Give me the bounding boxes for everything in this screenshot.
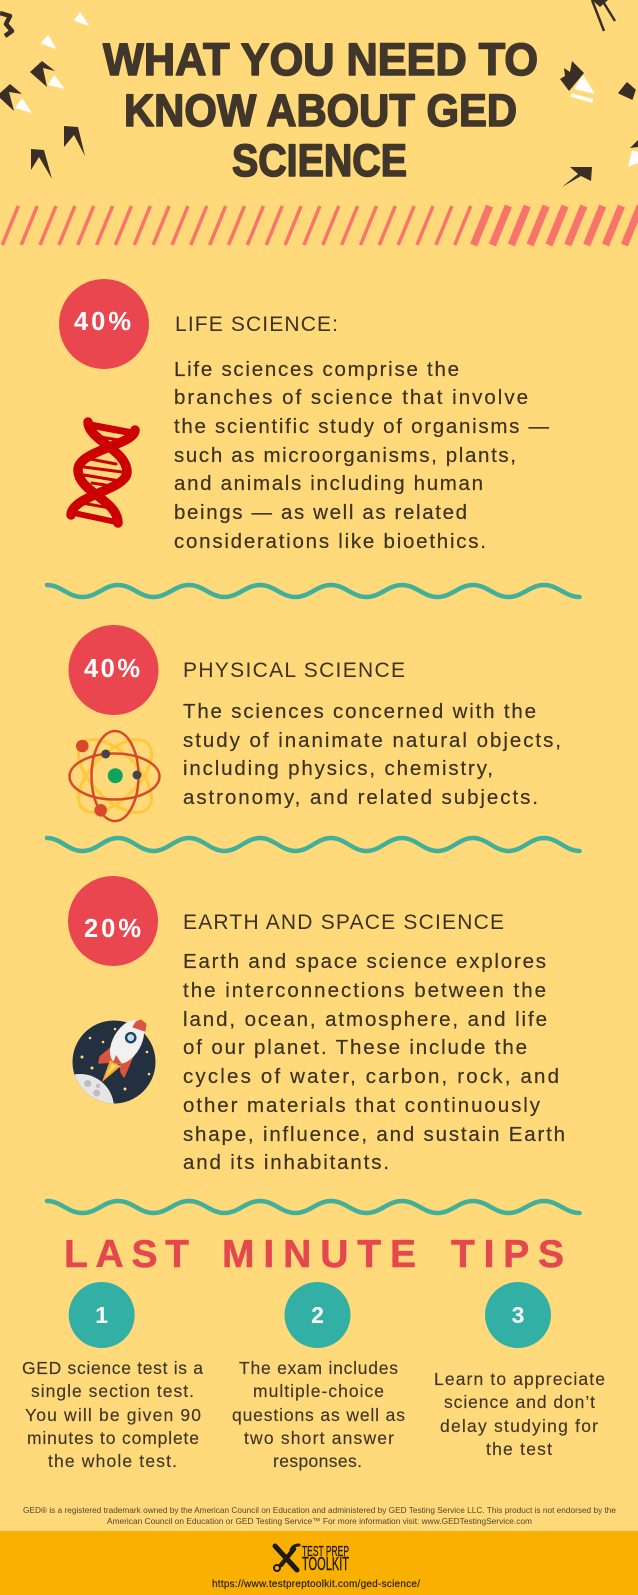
- tip 2 text: [232, 1358, 405, 1471]
- tip 2: [232, 1282, 405, 1471]
- panel: physical science: [66, 625, 561, 825]
- logo: Test Prep Toolkit: TEST PREP: [302, 1544, 349, 1560]
- body text: Earth and space science explores: [183, 950, 546, 973]
- tip 3 text: delay studying for: [440, 1416, 598, 1436]
- percent badge: 20%: [68, 876, 158, 966]
- body text: including physics, chemistry,: [183, 757, 493, 780]
- heading: EARTH AND SPACE SCIENCE: [183, 911, 504, 934]
- body text: cycles of water, carbon, rock, and: [183, 1065, 559, 1088]
- body text: such as microorganisms, plants,: [174, 444, 516, 467]
- body text: beings — as well as related: [174, 501, 467, 524]
- logo: Test Prep Toolkit: [274, 1544, 349, 1574]
- percent badge: 40%: [68, 625, 158, 715]
- percent badge: 40%: 40%: [74, 308, 131, 336]
- number badge 3: [485, 1282, 551, 1348]
- tip 3 text: [434, 1369, 605, 1459]
- heading: last minute tips: [64, 1233, 564, 1276]
- url: https://www.testpreptoolkit.com/ged-science/: [212, 1579, 420, 1590]
- title: SCIENCE: [232, 135, 407, 186]
- tip 3 text: science and don’t: [444, 1392, 595, 1412]
- panel: life science: [59, 279, 550, 553]
- disclaimer: [23, 1505, 616, 1526]
- tip 1 text: the whole test.: [48, 1451, 177, 1471]
- heading: PHYSICAL SCIENCE: [183, 659, 405, 682]
- tip 2 text: questions as well as: [232, 1405, 405, 1425]
- wave divider 2: [47, 838, 580, 851]
- tip 1 text: GED science test is a: [22, 1358, 203, 1378]
- heading: last minute tips: TIPS: [451, 1233, 564, 1276]
- body text: other materials that continuously: [183, 1094, 541, 1117]
- tip 2 text: two short answer: [244, 1428, 394, 1448]
- tip 2 text: responses.: [273, 1451, 362, 1471]
- disclaimer: American Council on Education or GED Testing Service™ For more information visit: www.GEDTestingService.com: [107, 1516, 532, 1526]
- percent badge: 20%: 20%: [84, 915, 141, 943]
- body text: land, ocean, atmosphere, and life: [183, 1008, 547, 1031]
- tip 2 text: multiple-choice: [253, 1381, 384, 1401]
- icon: DNA helix: [71, 422, 135, 523]
- body text: branches of science that involve: [174, 386, 528, 409]
- body text: [174, 358, 550, 553]
- disclaimer: GED® is a registered trademark owned by the American Council on Education and administered by GED Testing Service LLC. This product is not endorsed by the: [23, 1505, 616, 1515]
- number badge 2: [284, 1282, 350, 1348]
- title: WHAT YOU NEED TO: [103, 34, 538, 85]
- confetti: top right: [560, 0, 638, 187]
- wave divider 3: [47, 1201, 580, 1213]
- icon: atom: [66, 727, 164, 825]
- body text: shape, influence, and sustain Earth: [183, 1123, 565, 1146]
- percent badge: 40%: 40%: [84, 655, 140, 683]
- heading: last minute tips: MINUTE: [222, 1233, 416, 1276]
- body text: of our planet. These include the: [183, 1036, 527, 1059]
- body text: [183, 700, 561, 809]
- footer band: [0, 1531, 638, 1595]
- tip 1 text: minutes to complete: [27, 1428, 199, 1448]
- panel: earth and space science: [46, 876, 565, 1174]
- icon: rocket over moon: [72, 1020, 156, 1104]
- number badge 1: 1: [95, 1302, 108, 1328]
- tip 1 text: single section test.: [31, 1381, 194, 1401]
- number badge 1: [69, 1282, 135, 1348]
- striped divider: [2, 206, 638, 245]
- confetti: top left: [0, 13, 88, 179]
- number badge 3: 3: [512, 1302, 524, 1328]
- tip 3: [434, 1282, 605, 1459]
- tip 2 text: The exam includes: [239, 1358, 398, 1378]
- body text: considerations like bioethics.: [174, 530, 486, 553]
- body text: the scientific study of organisms —: [174, 415, 550, 438]
- wave divider 1: [47, 585, 580, 597]
- body text: study of inanimate natural objects,: [183, 729, 561, 752]
- body text: Life sciences comprise the: [174, 358, 459, 381]
- title: KNOW ABOUT GED: [124, 85, 517, 136]
- tip 1 text: You will be given 90: [25, 1405, 201, 1425]
- body text: and animals including human: [174, 472, 483, 495]
- body text: the interconnections between the: [183, 979, 546, 1002]
- body text: [183, 950, 565, 1174]
- body text: astronomy, and related subjects.: [183, 786, 538, 809]
- tip 1 text: [22, 1358, 203, 1471]
- body text: The sciences concerned with the: [183, 700, 536, 723]
- tip 1: [22, 1282, 203, 1471]
- body text: and its inhabitants.: [183, 1151, 389, 1174]
- tip 3 text: Learn to appreciate: [434, 1369, 605, 1389]
- percent badge: 40%: [59, 279, 149, 369]
- heading: LIFE SCIENCE:: [175, 313, 338, 336]
- heading: last minute tips: LAST: [64, 1233, 189, 1276]
- logo: Test Prep Toolkit: TOOLKIT: [302, 1554, 349, 1574]
- title: [103, 34, 538, 186]
- tip 3 text: the test: [486, 1439, 552, 1459]
- number badge 2: 2: [311, 1302, 324, 1328]
